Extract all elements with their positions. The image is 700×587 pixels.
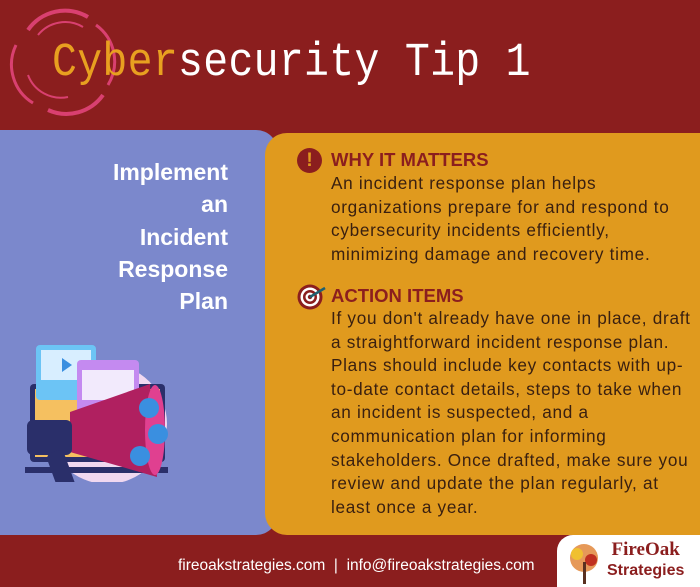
heading: why it matters: WHY IT MATTERS	[331, 149, 489, 170]
logo text: Strategies	[607, 562, 684, 579]
icon: cyber circle	[10, 8, 116, 116]
text: action: a straightforward incident response plan.	[331, 332, 669, 352]
illustration: megaphone	[25, 345, 168, 482]
text: action: If you don't already have one in place, draft	[331, 308, 691, 328]
footer text: fireoakstrategies.com | info@fireoakstrategies.com	[178, 557, 535, 574]
text: why: organizations prepare for and respond to	[331, 197, 670, 217]
text: action: review and update the plan regularly, at	[331, 473, 659, 493]
heading: tip	[113, 159, 228, 314]
icon: target	[298, 284, 326, 310]
text: action: Plans should include key contacts with up-	[331, 355, 683, 375]
heading: tip: Response	[118, 256, 228, 282]
text: why: An incident response plan helps	[331, 173, 596, 193]
heading: tip: an	[201, 191, 228, 217]
text: action	[331, 308, 691, 517]
heading: action items: ACTION ITEMS	[331, 285, 464, 306]
panel: right	[265, 133, 700, 535]
heading: tip: Incident	[140, 224, 228, 250]
text: why	[331, 173, 670, 264]
text: action: an incident is suspected, and a	[331, 402, 589, 422]
logo text: FireOak	[612, 539, 680, 560]
text: action: to-date contact details, steps to take when	[331, 379, 682, 399]
text: action: communication plan for informing	[331, 426, 607, 446]
logo	[557, 535, 700, 587]
icon: exclamation: !	[306, 150, 313, 171]
title: Cybersecurity Tip 1	[52, 36, 531, 90]
heading: tip: Plan	[179, 288, 228, 314]
icon: tree	[570, 544, 598, 584]
text: action: least once a year.	[331, 497, 478, 517]
panel: left	[0, 130, 278, 535]
heading: tip: Implement	[113, 159, 228, 185]
text: why: minimizing damage and recovery time.	[331, 244, 650, 264]
text: why: cybersecurity incidents efficiently,	[331, 220, 610, 240]
logo text	[607, 539, 684, 579]
text: action: stakeholders. Once drafted, make sure you	[331, 450, 688, 470]
icon: exclamation	[297, 148, 322, 173]
